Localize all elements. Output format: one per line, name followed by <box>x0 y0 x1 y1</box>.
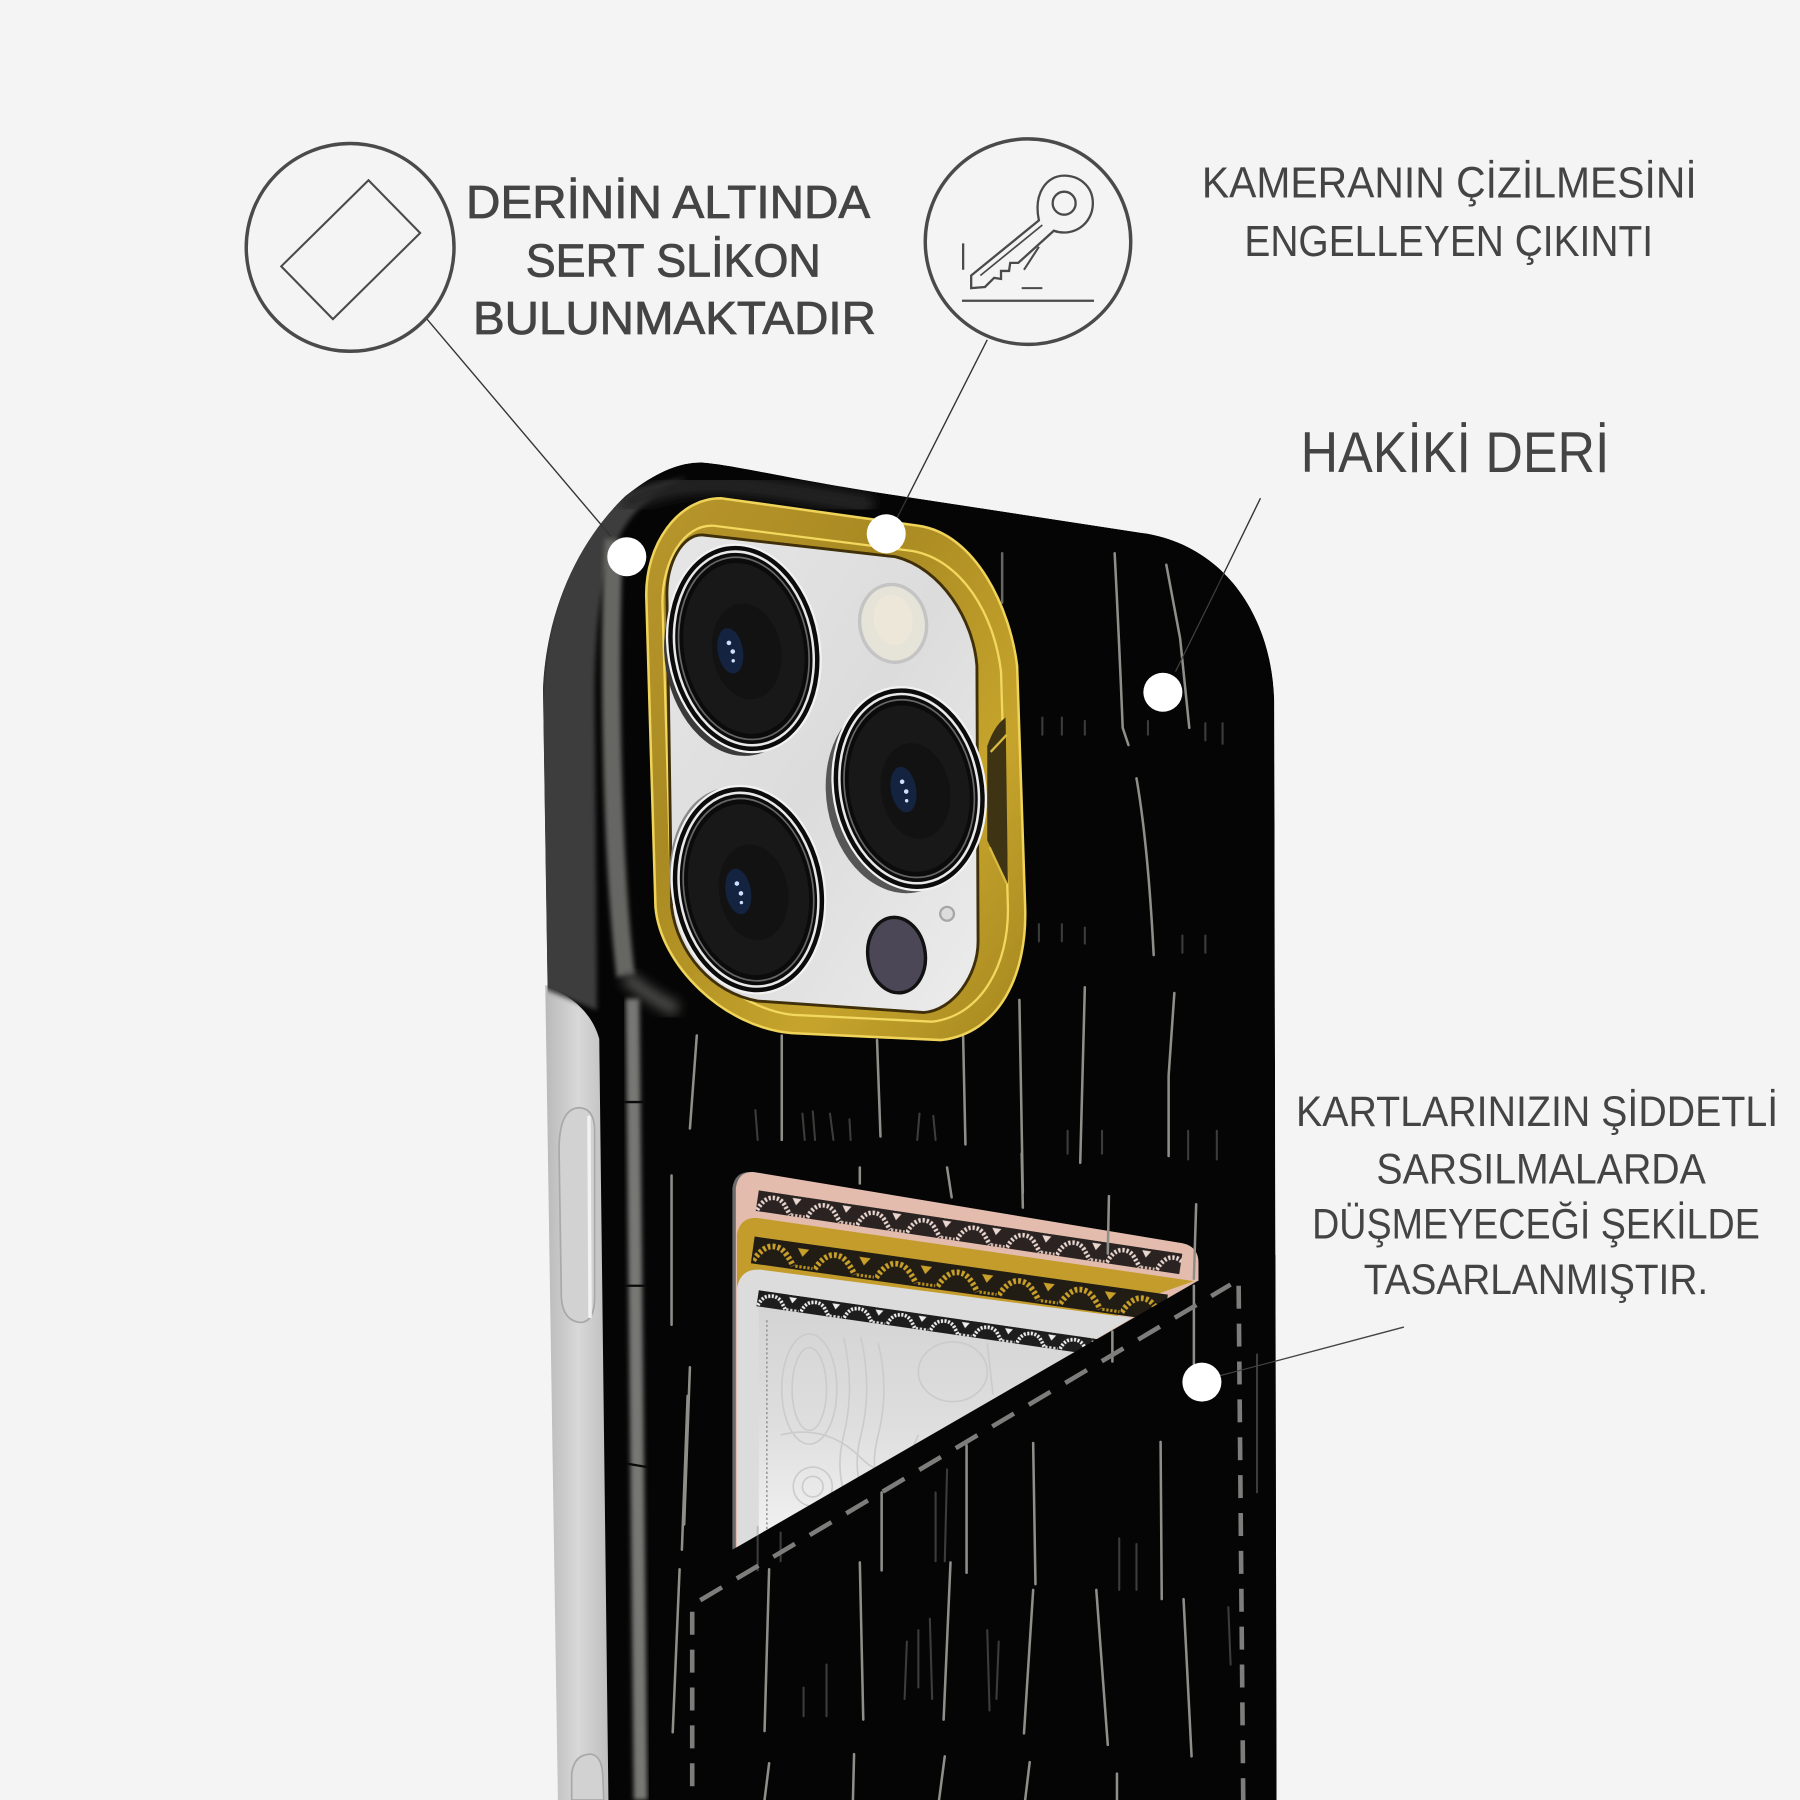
text: card pocket description: SARSILMALARDA <box>1376 1146 1706 1193</box>
marker dot: silicone <box>607 537 646 576</box>
marker dot: pocket <box>1182 1363 1221 1402</box>
stitching <box>692 1285 1243 1800</box>
text: card pocket description: TASARLANMIŞTIR. <box>1364 1256 1708 1303</box>
marker dot: leather <box>1143 673 1182 712</box>
card: silver <box>736 1270 1132 1550</box>
text: camera protection lip <box>1202 158 1697 266</box>
card: gold <box>737 1218 1194 1550</box>
leather grain lines <box>672 553 1257 1800</box>
lens: bottom left <box>654 772 843 1007</box>
flash <box>854 579 933 668</box>
microphone <box>940 907 954 921</box>
camera panel <box>667 535 978 1012</box>
marker dot: camera lip <box>867 514 906 553</box>
lens: top left <box>646 531 838 767</box>
silver phone edge <box>545 985 611 1800</box>
leader line: card pocket <box>1217 1327 1404 1376</box>
text: hard silicone under the leather: BULUNMAKTADIR <box>473 292 876 344</box>
gold frame <box>646 498 1025 1040</box>
camera module <box>646 498 1025 1040</box>
icon: key scratch in circle <box>925 139 1131 344</box>
text: card pocket description <box>1296 1088 1778 1303</box>
text: camera protection lip: KAMERANIN ÇİZİLMESİNİ <box>1202 158 1697 207</box>
card: rose <box>732 1172 1198 1550</box>
lens: right <box>809 674 1003 905</box>
lidar sensor <box>863 914 930 997</box>
leader line: silicone <box>427 319 611 536</box>
pocket flap <box>732 1254 1276 1779</box>
text: hard silicone under the leather: SERT SLİKON <box>526 235 821 287</box>
phone case <box>540 463 1286 1800</box>
leather body <box>540 463 1277 1800</box>
text: camera protection lip: ENGELLEYEN ÇIKINTI <box>1244 218 1653 266</box>
text: hard silicone under the leather <box>466 176 876 344</box>
text: genuine leather: HAKİKİ DERİ <box>1301 421 1609 485</box>
text: hard silicone under the leather: DERİNİN ALTINDA <box>466 176 871 228</box>
leader line: camera lip <box>893 340 987 526</box>
leader line: genuine leather <box>1176 498 1260 672</box>
icon: silicone plate in circle <box>246 143 454 351</box>
